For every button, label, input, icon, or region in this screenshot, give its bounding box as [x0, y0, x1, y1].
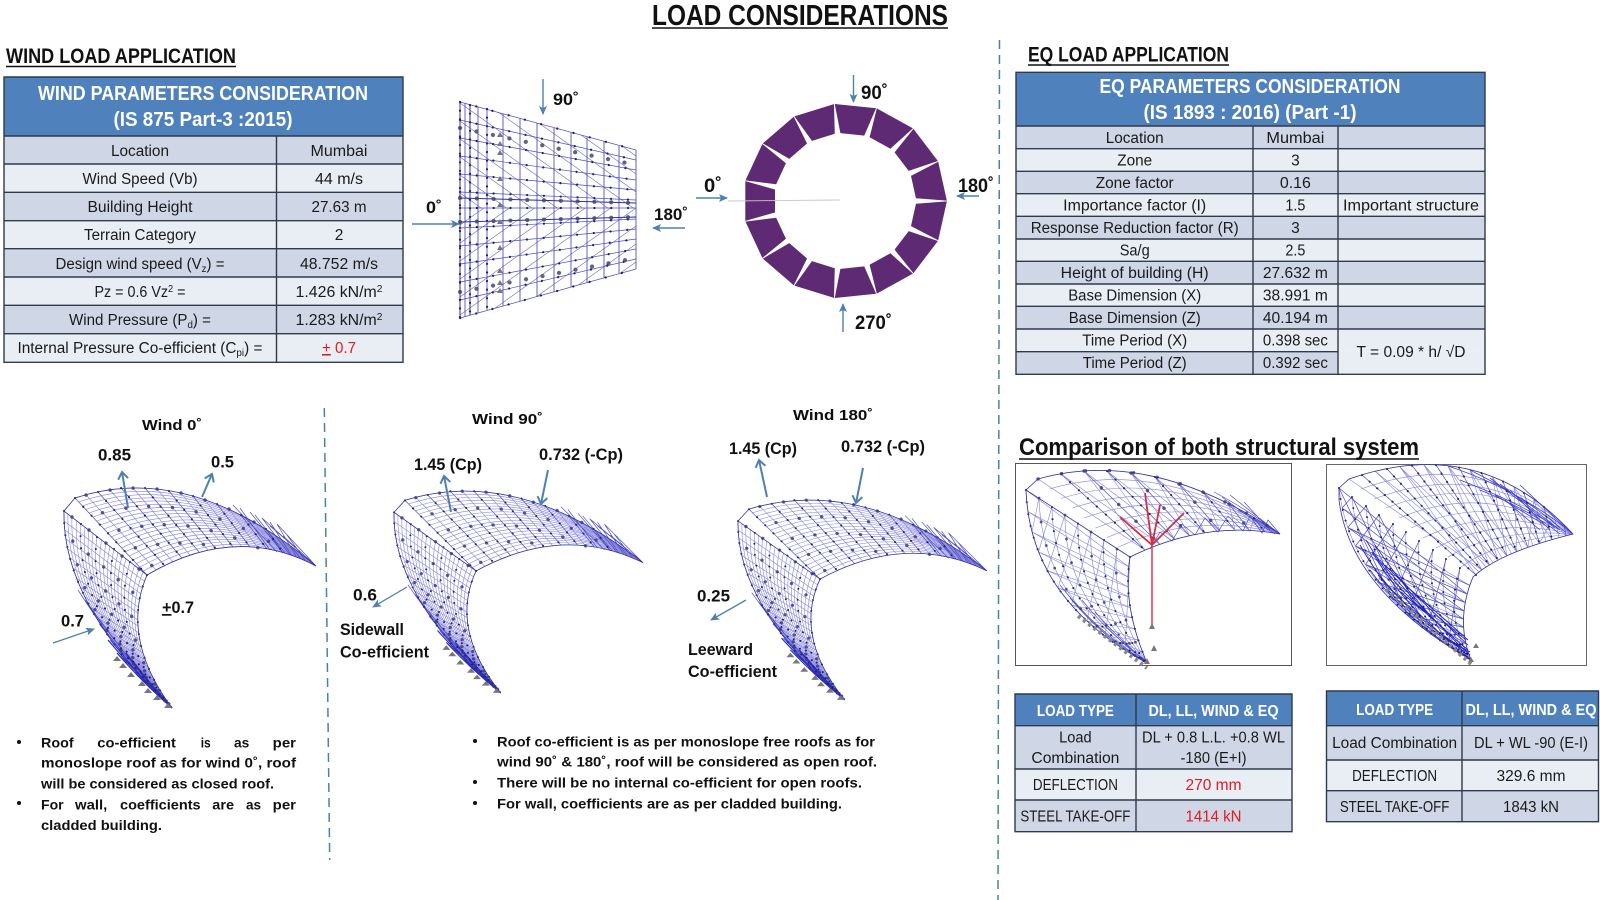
table: comparison without central column: DL + WL -90 (E-I)	[1474, 735, 1588, 752]
heading: wind 0: Wind 0˚	[142, 417, 202, 434]
table: eq parameters: Time Period (Z)	[1083, 355, 1187, 372]
arrow: 180 degree	[653, 227, 685, 229]
table: eq parameters: Base Dimension (Z)	[1069, 310, 1201, 327]
label: 0.25: 0.25	[697, 587, 730, 606]
label: 0.6: 0.6	[353, 586, 377, 605]
table: comparison without central column	[1326, 691, 1598, 822]
label: 0.7: 0.7	[61, 612, 84, 631]
arrow: 0.732 -Cp	[856, 468, 863, 503]
table: comparison with central column: 270 mm	[1186, 777, 1242, 794]
table: wind parameters: 2	[335, 227, 343, 244]
table: eq parameters: 2.5	[1285, 242, 1305, 260]
arrow: 180 degree	[957, 195, 979, 197]
table: comparison with central column: DL, LL, WIND & EQ	[1148, 703, 1278, 720]
table: eq parameters: 27.632 m	[1263, 265, 1328, 282]
table: comparison with central column: Combination	[1031, 750, 1119, 767]
arrow: wall 0.7	[53, 629, 94, 643]
label: 90 degree: 90˚	[861, 83, 888, 104]
table: comparison without central column: LOAD TYPE	[1356, 702, 1433, 719]
notes: wind 90 and 180: wind 90˚ & 180˚, roof will be considered as open roof.	[496, 754, 877, 770]
shell mesh: wind 90	[394, 491, 643, 693]
heading: eq load application: EQ LOAD APPLICATION	[1028, 44, 1229, 66]
label: internal +0.7: +0.7	[162, 598, 194, 617]
label: sidewall co-efficient: Sidewall	[340, 620, 404, 639]
table: eq parameters: Importance factor (I)	[1063, 198, 1206, 214]
table: wind parameters: 48.752 m/s	[300, 256, 378, 273]
label: 270 degree: 270˚	[855, 313, 892, 334]
table: comparison without central column: DEFLECTION	[1352, 768, 1437, 785]
table: eq parameters: 3	[1291, 152, 1300, 170]
label: leeward co-efficient: Co-efficient	[688, 662, 777, 681]
table: wind parameters: Design wind speed (V	[56, 256, 206, 273]
label: 0 degree: 0˚	[426, 198, 442, 217]
table: wind parameters: Wind Speed (Vb)	[82, 171, 198, 188]
heading: comparison: Comparison of both structural system	[1019, 434, 1419, 461]
table: wind parameters: ) =	[244, 340, 262, 357]
table: comparison with central column: DEFLECTION	[1033, 777, 1118, 794]
shell mesh with trusses	[1026, 470, 1280, 668]
table: comparison without central column: STEEL TAKE-OFF	[1340, 799, 1449, 816]
table: eq parameters: Important structure	[1343, 198, 1479, 214]
notes: wind 0: as	[246, 796, 261, 812]
table: wind parameters: 2	[377, 312, 383, 323]
notes: wind 0: For	[41, 796, 64, 812]
panel: wind 0 degree	[53, 417, 316, 708]
table: wind parameters: =	[173, 284, 186, 301]
notes: wind 90 and 180: For wall, coefficients are as per cladded building.	[497, 795, 842, 811]
table: comparison with central column: LOAD TYPE	[1037, 703, 1114, 720]
panel: structure with central column	[1016, 464, 1292, 668]
table: wind parameters: Wind Pressure (P	[69, 312, 190, 329]
table: comparison without central column: 1843 kN	[1503, 799, 1559, 816]
notes: wind 0: is	[201, 734, 211, 750]
label: leeward co-efficient	[688, 640, 777, 681]
notes: wind 0: cladded building.	[41, 817, 162, 833]
heading: wind load application: WIND LOAD APPLICATION	[6, 45, 236, 68]
notes: wind 0: monoslope roof as for wind 0˚, roof	[41, 755, 296, 771]
label: sidewall co-efficient: Co-efficient	[340, 643, 429, 662]
label: 0.85: 0.85	[98, 446, 131, 465]
label: 0.732 -Cp: 0.732 (-Cp)	[841, 437, 925, 456]
table: wind parameters: + 0.7	[322, 340, 356, 357]
label: 180 degree: 180˚	[958, 176, 994, 197]
notes: wind 0: will be considered as closed roof.	[40, 775, 274, 791]
table: eq parameters: T = 0.09 * h/ √D	[1356, 344, 1466, 361]
arrow: sidewall 0.6	[373, 587, 407, 607]
panel: structure without central column	[1326, 464, 1586, 666]
table: wind parameters: Building Height	[88, 199, 193, 216]
notes: wind 0: per	[273, 796, 297, 812]
table: wind parameters: (IS 875 Part-3 :2015)	[114, 109, 292, 131]
label: 1.45 Cp: 1.45 (Cp)	[729, 439, 797, 458]
table: comparison with central column	[1015, 694, 1292, 832]
table: comparison with central column: STEEL TAKE-OFF	[1020, 809, 1130, 826]
arrow: 270 degree	[842, 304, 844, 332]
notes: wind 90 and 180: There will be no internal co-efficient for open roofs.	[497, 774, 862, 790]
table: wind parameters: Terrain Category	[84, 227, 196, 244]
table: wind parameters: z	[202, 264, 207, 275]
table: eq parameters: Zone	[1117, 152, 1152, 170]
table: eq parameters: Zone factor	[1096, 175, 1174, 192]
notes: wind 0: Roof	[41, 734, 74, 750]
table: eq parameters: 1.5	[1285, 198, 1305, 214]
title: LOAD CONSIDERATIONS	[652, 0, 948, 32]
label: 90 degree: 90˚	[553, 90, 579, 109]
table: wind parameters: 1.426 kN/m	[296, 284, 375, 301]
red central column and branches	[1120, 493, 1184, 629]
table: wind parameters: ) =	[207, 256, 224, 273]
arrow: leeward 0.25	[711, 600, 746, 620]
table: comparison without central column: 329.6 mm	[1496, 768, 1566, 785]
table: eq parameters: 38.991 m	[1263, 288, 1328, 304]
notes: wind 90 and 180	[473, 734, 877, 811]
table: eq parameters: Base Dimension (X)	[1068, 288, 1201, 304]
notes: wind 0: per	[273, 734, 297, 750]
notes: wind 0: as	[234, 734, 250, 750]
arrow: 1.45 Cp	[759, 460, 767, 497]
table: eq parameters: Mumbai	[1266, 130, 1324, 147]
ring of roof segments	[745, 104, 947, 298]
table: wind parameters: ) =	[193, 312, 211, 329]
label: leeward co-efficient: Leeward	[688, 640, 753, 659]
table: wind parameters: WIND PARAMETERS CONSIDERATION	[38, 83, 368, 105]
arrow: roof 0.85	[122, 472, 128, 508]
table: eq parameters: (IS 1893 : 2016) (Part -1)	[1144, 102, 1356, 124]
table: comparison with central column: Load	[1059, 730, 1092, 747]
heading: wind 90: Wind 90˚	[472, 411, 543, 428]
notes: wind 0: are	[212, 796, 234, 812]
table: eq parameters: Response Reduction factor (R)	[1031, 220, 1239, 237]
table: wind parameters: Pz = 0.6 Vz	[94, 284, 174, 301]
table: wind parameters: pi	[236, 348, 244, 359]
notes: wind 0: co-efficient	[97, 734, 176, 750]
table: eq parameters: Location	[1106, 130, 1164, 147]
table: wind parameters	[4, 77, 403, 362]
mesh: flat wall elevation	[458, 100, 636, 320]
table: wind parameters: Location	[111, 143, 169, 160]
arrow: 0 degree	[412, 223, 459, 225]
table: eq parameters: EQ PARAMETERS CONSIDERATION	[1100, 76, 1400, 98]
table: wind parameters: 1.283 kN/m	[296, 312, 375, 329]
panel: wind 90 degree	[340, 411, 643, 693]
arrow: 1.45 Cp	[444, 476, 451, 512]
table: eq parameters: 0.398 sec	[1263, 332, 1328, 350]
dense shell mesh	[1339, 465, 1573, 664]
table: eq parameters: 40.194 m	[1263, 310, 1328, 327]
table: eq parameters: Sa/g	[1120, 242, 1150, 260]
table: comparison without central column: Load Combination	[1332, 735, 1457, 752]
label: 0 degree: 0˚	[704, 176, 722, 197]
table: eq parameters: 3	[1291, 220, 1300, 237]
notes: wind 0: coefficients	[120, 796, 201, 812]
table: comparison with central column: 1414 kN	[1186, 809, 1242, 826]
diagram: ring plan with wind directions	[696, 75, 994, 334]
table: comparison with central column: DL + 0.8 L.L. +0.8 WL	[1142, 730, 1285, 747]
table: eq parameters	[1016, 72, 1485, 374]
table: wind parameters: 2	[168, 284, 174, 295]
label: 0.5: 0.5	[211, 453, 234, 472]
arrow: 0 degree	[696, 197, 727, 199]
shell mesh: wind 0	[64, 488, 316, 708]
table: eq parameters: 0.16	[1280, 175, 1311, 192]
arrow: 0.732 -Cp	[541, 470, 548, 504]
table: wind parameters: 27.63 m	[312, 199, 366, 216]
table: wind parameters: Mumbai	[310, 143, 368, 160]
label: 1.45 Cp: 1.45 (Cp)	[414, 455, 482, 474]
table: eq parameters: Time Period (X)	[1082, 332, 1187, 350]
shell mesh: wind 180	[738, 500, 987, 700]
table: eq parameters: 0.392 sec	[1263, 355, 1328, 372]
notes: wind 90 and 180: Roof co-efficient is as per monoslope free roofs as for	[497, 734, 876, 750]
table: eq parameters: Height of building (H)	[1061, 265, 1209, 282]
label: 180 degree: 180˚	[654, 205, 688, 224]
table: wind parameters: 44 m/s	[315, 171, 363, 188]
label: 0.732 -Cp: 0.732 (-Cp)	[539, 445, 623, 464]
table: comparison with central column: -180 (E+I)	[1180, 750, 1246, 767]
heading: wind 180: Wind 180˚	[793, 407, 873, 424]
table: wind parameters: d	[187, 320, 193, 331]
notes: wind 0: wall,	[74, 796, 107, 812]
diagram: flat wall mesh with wind directions	[412, 79, 687, 320]
arrow: roof 0.5	[202, 474, 212, 497]
table: wind parameters: Internal Pressure Co-efficient (C	[18, 340, 239, 357]
notes: wind 0	[17, 734, 297, 833]
panel: wind 180 degree	[688, 407, 987, 700]
arrow: 90 degree	[852, 75, 854, 102]
arrow: 90 degree	[542, 79, 544, 114]
table: wind parameters: 2	[377, 284, 383, 295]
label: sidewall co-efficient	[340, 620, 429, 662]
